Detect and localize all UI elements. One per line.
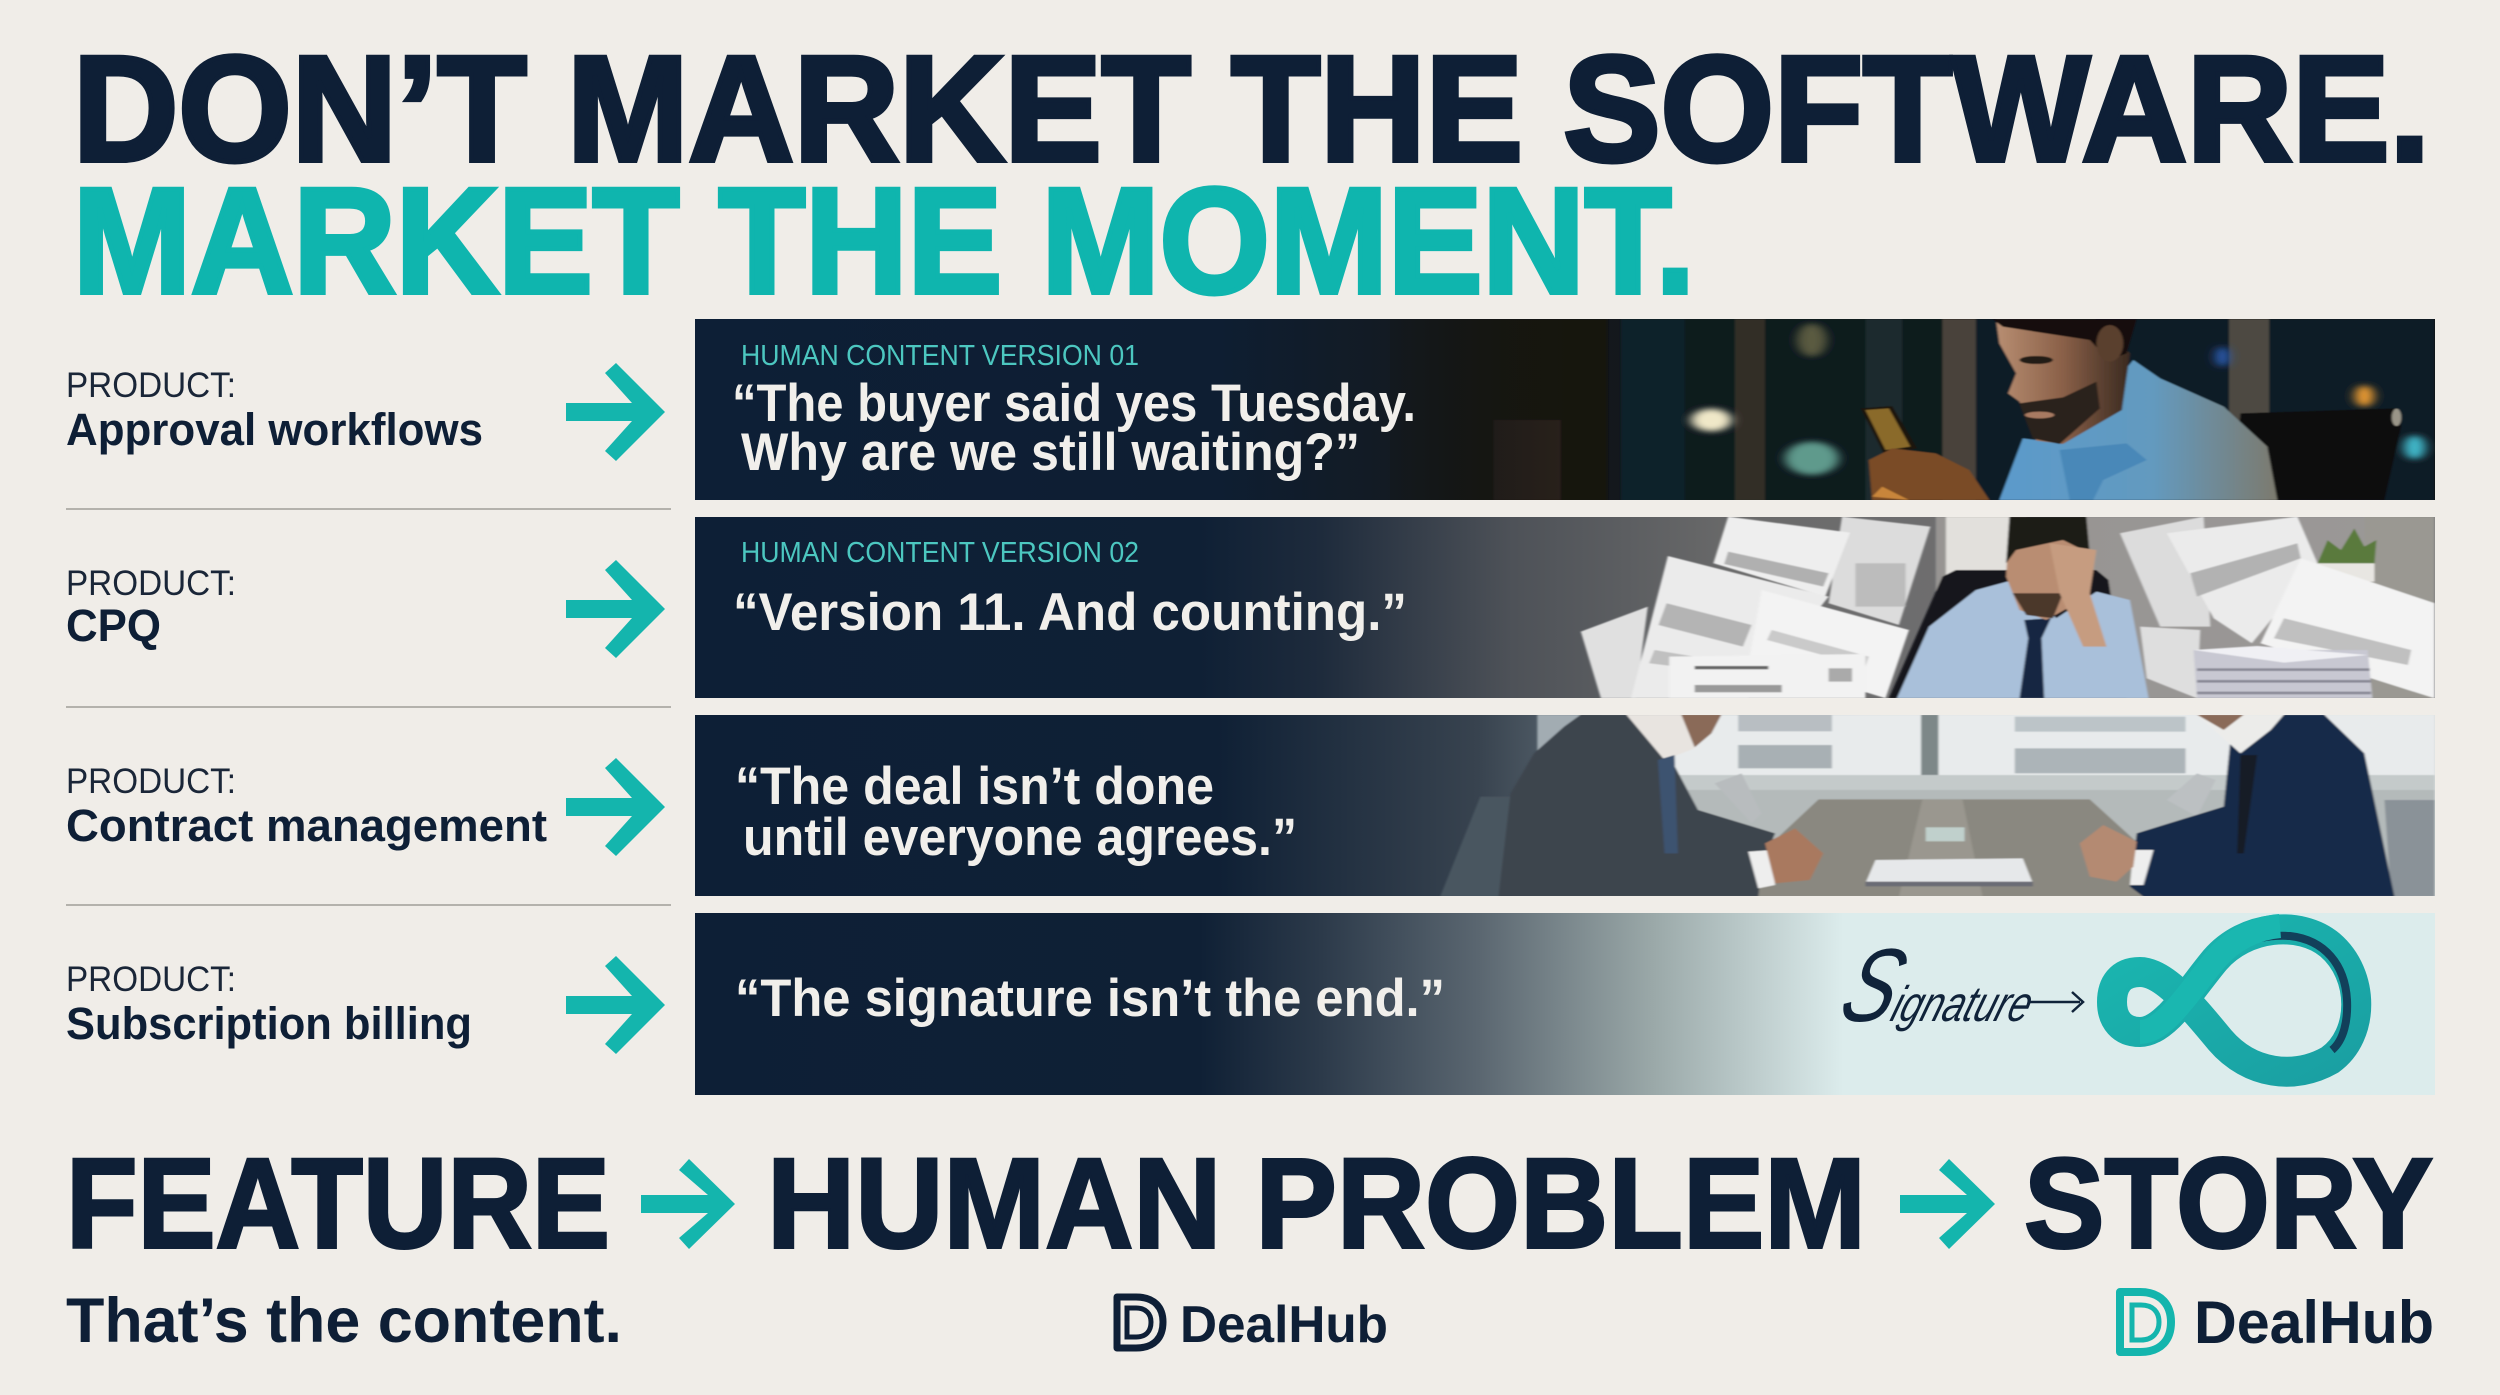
- row 4 product label: PRODUCT:: [66, 960, 236, 999]
- quote 3: until everyone agrees.”: [743, 808, 1297, 867]
- stack of paper: [2194, 650, 2372, 698]
- quote 1: [732, 374, 1416, 482]
- icon: teal D mark: [2120, 1292, 2171, 1352]
- quote 1: Why are we still waiting?”: [741, 423, 1360, 482]
- row 2 arrow: [566, 560, 665, 658]
- formula: feature to human problem to story: STORY: [2024, 1132, 2433, 1276]
- right man: [2130, 715, 2395, 897]
- shirt and tie: [1897, 578, 2149, 698]
- right DealHub logo: DealHub: [2194, 1289, 2434, 1356]
- arrow 1: [641, 1159, 735, 1249]
- hand: [1869, 448, 1989, 500]
- photo: man looking at phone at night: [1400, 319, 2435, 501]
- papers behind left: [1829, 517, 1930, 625]
- shirt: [1999, 360, 2277, 500]
- plant: [2317, 528, 2376, 565]
- left man: [1498, 715, 1775, 897]
- icon: dark D mark: [1117, 1297, 1163, 1348]
- arrow 2: [1900, 1159, 1995, 1249]
- icon: infinity loop: [2112, 926, 2356, 1072]
- row 4 product label: [66, 960, 472, 1049]
- quote 3: [735, 757, 1297, 867]
- phone: [1861, 406, 1917, 453]
- window lights: [1691, 323, 2425, 475]
- quote 4: “The signature isn’t the end.”: [735, 969, 1445, 1028]
- signature script: Signature: [1829, 926, 2057, 1043]
- row 3 arrow: [566, 758, 665, 856]
- row 4 arrow: [566, 956, 665, 1054]
- row 2 product label: PRODUCT:: [66, 564, 236, 603]
- row 1 product label: PRODUCT:: [66, 366, 236, 405]
- title line 1: DON’T MARKET THE SOFTWARE.: [73, 24, 2430, 192]
- title: [73, 24, 2430, 324]
- chair: [2230, 408, 2401, 500]
- title line 2: MARKET THE MOMENT.: [73, 156, 1695, 324]
- signature script: [1843, 948, 2085, 1032]
- formula: feature to human problem to story: FEATURE: [66, 1132, 610, 1276]
- formula: feature to human problem to story: HUMAN PROBLEM: [767, 1132, 1866, 1276]
- papers right: [2120, 517, 2210, 627]
- quote 1: “The buyer said yes Tuesday.: [732, 374, 1416, 433]
- row 3 product label: Contract management: [66, 800, 547, 851]
- panel: banner 4 signature to infinity: [695, 913, 2435, 1095]
- right chair: [2180, 774, 2214, 814]
- chair: [1889, 570, 2127, 698]
- row 4 product label: Subscription billing: [66, 998, 472, 1049]
- quote 2: “Version 11. And counting.”: [733, 583, 1407, 642]
- left chair: [1440, 797, 1514, 897]
- label: version 02: HUMAN CONTENT VERSION 02: [741, 537, 1139, 569]
- photo: stressed man among documents: [1581, 517, 2435, 698]
- head: [2004, 540, 2077, 621]
- row 3 product label: PRODUCT:: [66, 762, 236, 801]
- panel: banner 3 negotiation table: [695, 715, 2435, 897]
- quote 3: “The deal isn’t done: [735, 757, 1214, 816]
- row 2 product label: [66, 564, 236, 651]
- row 1 product label: [66, 366, 483, 455]
- centre DealHub logo: DealHub: [1180, 1296, 1388, 1354]
- panel: banner 1 buyer at night: [695, 319, 2435, 501]
- document on table: [1865, 858, 2033, 883]
- formula: feature to human problem to story: [66, 1132, 2433, 1276]
- closing line: That’s the content.: [66, 1286, 622, 1356]
- photo: two men at a meeting table: [1440, 715, 2435, 897]
- row 3 product label: [66, 762, 547, 851]
- neck and face: [1996, 319, 2130, 444]
- row 1 arrow: [566, 363, 665, 461]
- panel: banner 2 version chaos: [695, 517, 2435, 698]
- row 1 product label: Approval workflows: [66, 404, 483, 455]
- label: version 01: HUMAN CONTENT VERSION 01: [741, 340, 1139, 372]
- row 2 product label: CPQ: [66, 600, 161, 651]
